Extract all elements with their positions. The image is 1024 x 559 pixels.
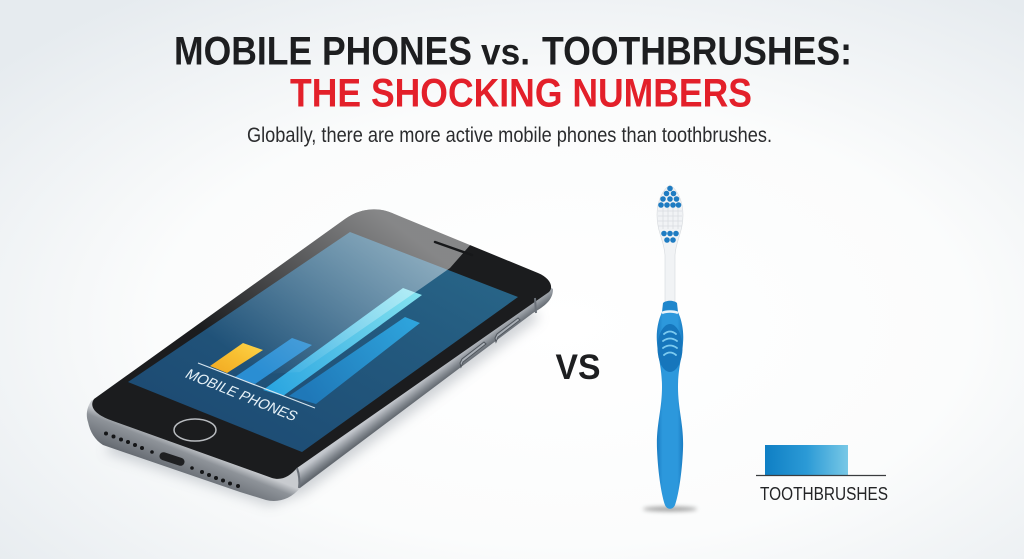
speaker grille right [190,466,240,488]
brush head and neck [657,185,683,304]
home button [174,419,216,441]
phone body side edge [298,280,553,488]
title: TOOTHBRUSHES: [542,30,852,74]
bar chart on screen [198,288,422,408]
title [174,30,852,116]
glare [94,209,472,399]
vs label: VS [556,348,600,387]
collar [662,301,678,312]
subtitle highlight: THE SHOCKING NUMBERS [290,72,752,116]
bristle dots [658,186,681,243]
icon: mobile phone [87,209,553,506]
charging port [158,451,186,467]
earpiece [435,242,472,255]
handle [657,310,683,509]
title: vs. [481,32,530,72]
phone front face [92,209,551,479]
title: MOBILE PHONES [174,30,472,74]
screen [128,232,518,452]
phone body front edge [87,400,300,501]
side buttons [460,318,520,367]
toothbrushes bar [756,445,888,504]
screen label: MOBILE PHONES [182,367,301,425]
toothbrushes label: TOOTHBRUSHES [760,484,888,504]
bristles [658,208,682,229]
icon: toothbrush [643,185,697,512]
grip [658,324,682,372]
speaker grille left [104,432,154,454]
description text: Globally, there are more active mobile phones than toothbrushes. [247,124,772,147]
